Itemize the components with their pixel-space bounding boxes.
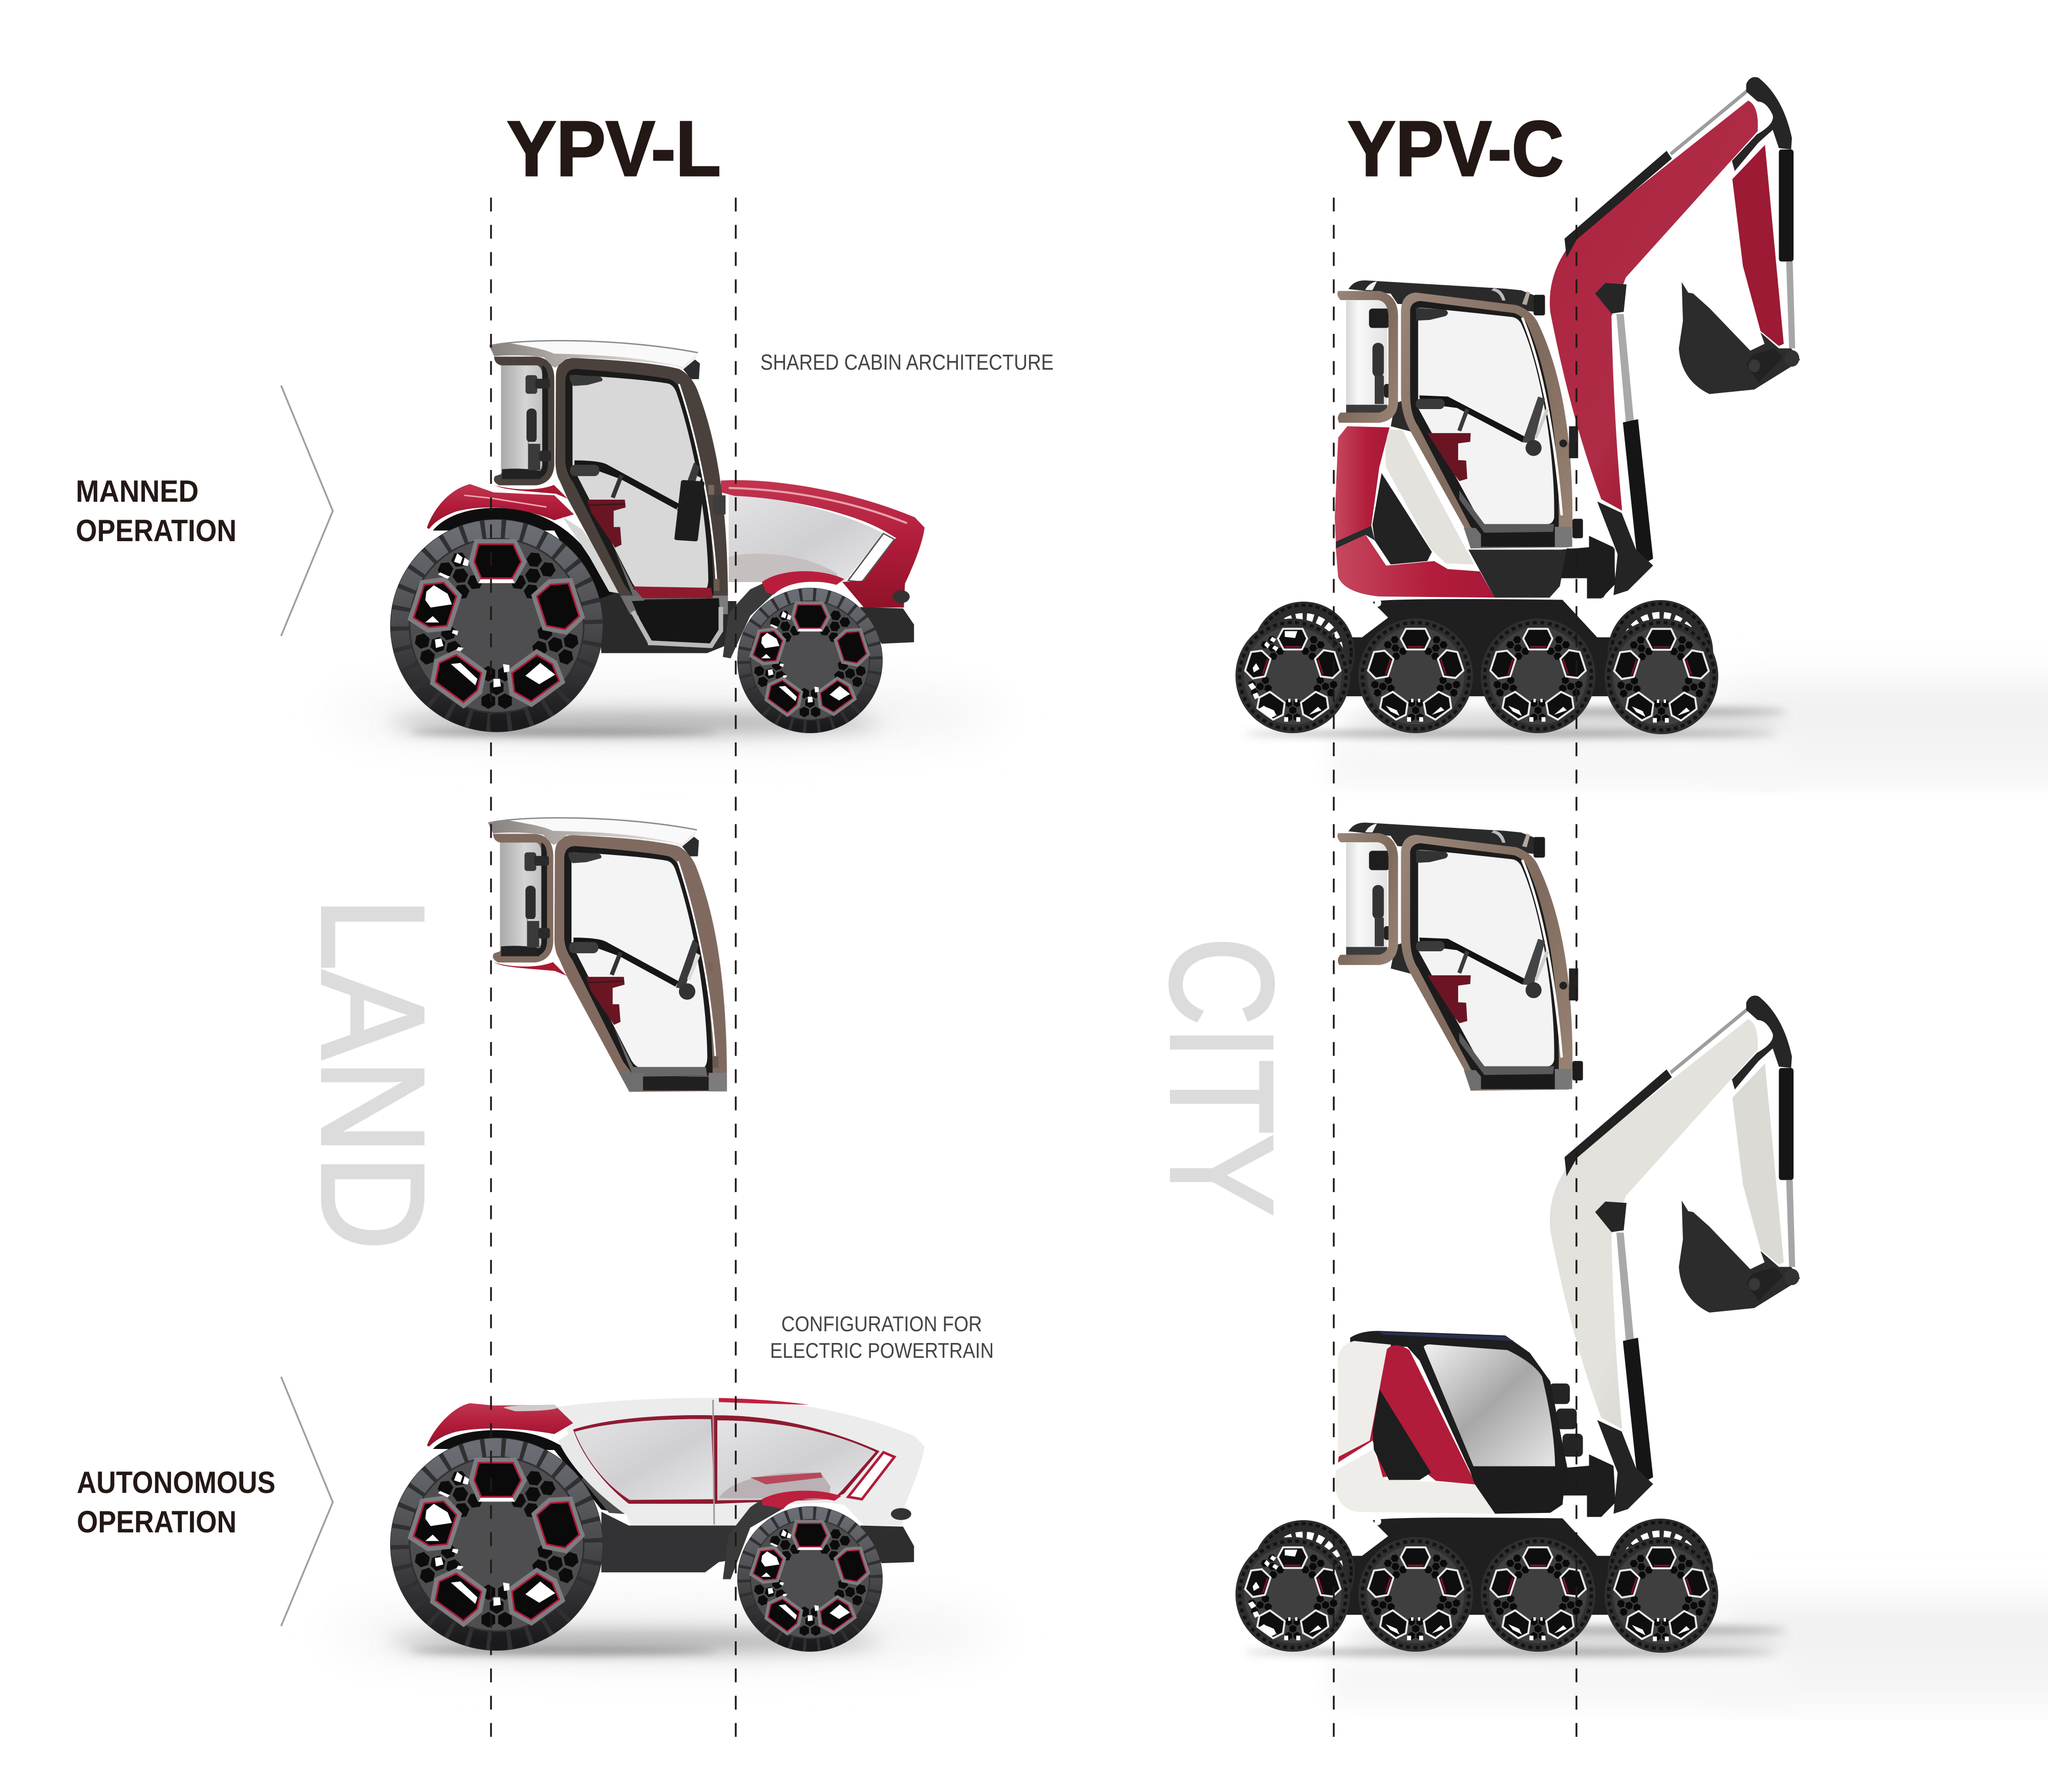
row label: autonomous operation bbox=[77, 1465, 275, 1539]
ground shadow: lower tractor bbox=[328, 1605, 1004, 1661]
dashed guide lines bbox=[491, 198, 1576, 1741]
vehicle: YPV-L manned tractor bbox=[390, 340, 925, 733]
rear wheel: honeycomb tyre bbox=[390, 519, 603, 732]
watermark: LAND: LAND bbox=[291, 897, 454, 1250]
ground shadow: lower excavator bbox=[1244, 1610, 2048, 1707]
ground shadow: upper tractor bbox=[328, 686, 1004, 742]
crawler wheels bbox=[1235, 600, 1718, 734]
annotation: electric powertrain configuration bbox=[770, 1312, 994, 1362]
row label: manned operation: MANNED bbox=[76, 474, 199, 508]
cabin: shared YPV-C cab module bbox=[1337, 823, 1583, 1091]
vehicle: YPV-C autonomous excavator bbox=[1235, 996, 1800, 1653]
annotation: electric powertrain configuration: CONFIGURATION FOR bbox=[781, 1312, 982, 1336]
front wheel: honeycomb tyre bbox=[737, 1506, 883, 1652]
row label: manned operation bbox=[76, 474, 237, 548]
title: YPV-L: YPV-L bbox=[507, 105, 721, 193]
vehicle: YPV-C manned excavator bbox=[1235, 77, 1800, 734]
vehicle: YPV-L autonomous tractor bbox=[390, 1398, 925, 1652]
ground shadow: upper excavator bbox=[1244, 691, 2048, 788]
row label: manned operation: OPERATION bbox=[76, 514, 237, 548]
rear wheel: honeycomb tyre bbox=[390, 1438, 603, 1651]
annotation: electric powertrain configuration: ELECTRIC POWERTRAIN bbox=[770, 1338, 994, 1362]
cabin: shared YPV-L cab module bbox=[488, 818, 727, 1092]
crawler wheels bbox=[1235, 1519, 1718, 1653]
chevron arrow: manned row bbox=[281, 386, 333, 636]
watermark: CITY: CITY bbox=[1140, 937, 1303, 1216]
annotation: shared cabin architecture: SHARED CABIN ARCHITECTURE bbox=[760, 350, 1054, 375]
chevron arrow: autonomous row bbox=[281, 1377, 333, 1626]
row label: autonomous operation: AUTONOMOUS bbox=[77, 1465, 275, 1500]
front wheel: honeycomb tyre bbox=[737, 588, 883, 733]
row label: autonomous operation: OPERATION bbox=[77, 1505, 237, 1539]
title: YPV-C: YPV-C bbox=[1348, 105, 1564, 193]
